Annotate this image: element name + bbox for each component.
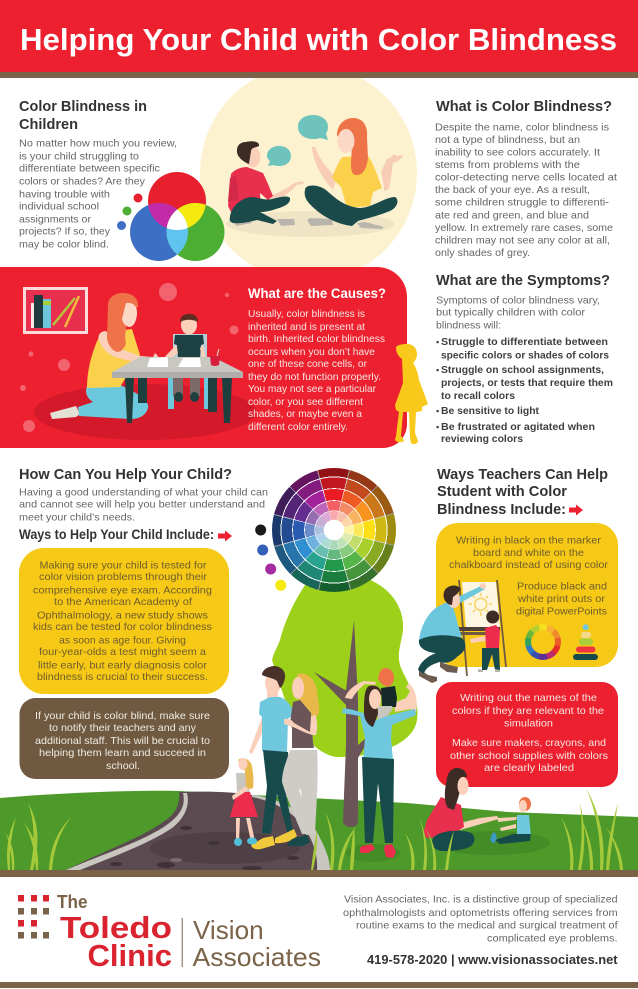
dots beside colour wheel <box>255 524 286 591</box>
logo: The Toledo Clinic Vision Associates: Vision <box>193 915 264 945</box>
panel: teachers tips, red: Writing out the names of the <box>460 692 597 704</box>
panel: notify teachers, brown: If your child is color blind, make sure <box>35 710 210 722</box>
causes text: You may not see a particular <box>248 383 376 395</box>
family: tall man <box>249 666 297 849</box>
causes text: shades, or maybe even a <box>248 408 362 420</box>
body text: only shades of grey. <box>435 247 530 259</box>
symptoms bullet list: Struggle to differentiate between <box>441 336 608 348</box>
icon: stacking toy <box>573 624 598 660</box>
seated mother's head over red panel <box>445 768 468 810</box>
panel: teachers tips, red: are clearly labeled <box>484 762 574 774</box>
causes text: inherited and is present at <box>248 321 365 333</box>
panel: ways to help, yellow: Ophthalmology, a new study shows <box>37 610 208 622</box>
footer description <box>343 894 618 944</box>
body text: meet your child’s needs. <box>19 512 135 524</box>
panel: teachers tips, yellow <box>436 523 618 667</box>
symptoms bullet list: specific colors or shades of colors <box>441 350 609 362</box>
ways teachers can help heading: Ways Teachers Can Help <box>437 466 608 483</box>
panel: ways to help, yellow: four-year-olds a test might seem a <box>39 646 206 658</box>
panel: teachers tips, red <box>436 682 618 787</box>
panel: notify teachers, brown: additional staff. This will be crucial to <box>35 735 210 747</box>
tip text: black and white on boards: chalkboard instead of using color <box>449 559 609 571</box>
ways teachers can help heading: Blindness Include: <box>437 501 566 518</box>
icon: colour mixing venn diagram <box>117 172 224 261</box>
panel: teachers tips, red: colors if they are relevant to the <box>452 705 604 717</box>
body text: inability to see colors accurately. It <box>435 146 600 158</box>
logo square grid <box>18 895 49 938</box>
panel: notify teachers, brown: to notify their teachers and any <box>49 722 197 734</box>
tip text: print outs: digital PowerPoints <box>516 606 607 618</box>
panel: teachers tips, red: simulation <box>504 718 553 730</box>
panel: ways to help, yellow: comprehensive eye exam. According <box>33 584 212 596</box>
woman at table <box>50 293 158 419</box>
body text <box>435 122 617 259</box>
heading: What are the Symptoms? <box>436 272 610 289</box>
intro text: having trouble with <box>19 188 110 200</box>
symptoms bullet list <box>436 336 613 445</box>
boy figure <box>228 141 304 226</box>
boy at table <box>160 314 210 409</box>
causes text: Usually, color blindness is <box>248 308 365 320</box>
panel: ways to help, yellow: Making sure your child is tested for <box>40 560 207 572</box>
body text: Having a good understanding of what your child can <box>19 486 268 498</box>
ground shadows <box>346 831 550 862</box>
symptoms bullet list: Be frustrated or agitated when <box>441 421 595 433</box>
logo: The Toledo Clinic Vision Associates: Clinic <box>88 938 172 973</box>
footer description: complicated eye problems. <box>487 932 618 944</box>
footer description: routine exams to the medical and surgical treatment of <box>356 920 618 932</box>
intro text: is your child struggling to <box>19 150 139 162</box>
sub-heading: Ways to Help Your Child Include: <box>19 527 214 542</box>
body text: children may not see any color at all, <box>435 234 610 246</box>
footer description: ophthalmologists and optometrists offering services from <box>343 907 618 919</box>
intro heading: Color Blindness in Children: Color Blindness in <box>19 98 147 115</box>
logo: The Toledo Clinic Vision Associates: Toledo <box>60 910 172 945</box>
symptoms bullet list: projects, or tests that require them <box>441 377 613 389</box>
body text: yellow. In extremely rare cases, some <box>435 222 613 234</box>
body text <box>19 486 268 524</box>
family: small girl <box>230 758 258 846</box>
family: blonde woman <box>282 673 319 846</box>
heading: How Can You Help Your Child? <box>19 466 232 483</box>
woman figure <box>305 118 403 229</box>
intro text: but typically children with color <box>436 306 586 318</box>
teacher and child at easel <box>418 580 506 683</box>
what are the symptoms section <box>436 272 613 445</box>
panel: ways to help, yellow: to the American Academy of <box>54 596 192 608</box>
panel: what are the causes <box>0 267 407 448</box>
decorative bubbles and floor <box>20 283 256 440</box>
icon: yellow girl silhouette <box>395 344 428 444</box>
footer contact: 419-578-2020 | www.visionassociates.net <box>367 953 618 967</box>
causes text: one of these cone cells, or <box>248 358 367 370</box>
body text: ate red and green, and blue and <box>435 209 589 221</box>
title: Helping Your Child with Color Blindness <box>20 22 617 57</box>
icon: sun drawing <box>469 593 492 616</box>
ways teachers can help heading: Student with Color <box>437 483 567 500</box>
intro text: may be color blind. <box>19 238 109 250</box>
panel: ways to help, yellow: blindness is crucial to their success. <box>37 671 208 683</box>
logo: The Toledo Clinic Vision Associates <box>18 892 321 973</box>
panel: ways to help, yellow: little early, but early diagnosis color <box>38 660 208 672</box>
intro text: projects? If so, they <box>19 226 111 238</box>
how can you help section <box>19 466 268 542</box>
icon: speech bubble small <box>267 146 291 166</box>
body text: Despite the name, color blindness is <box>435 122 609 134</box>
panel: ways to help, yellow <box>19 548 229 694</box>
intro heading: Color Blindness in Children <box>19 98 147 133</box>
panel: notify teachers, brown <box>20 698 229 779</box>
tree trunk <box>314 620 368 827</box>
causes text: color, or you see different <box>248 396 363 408</box>
panel: ways to help, yellow: as soon as age four. Giving <box>59 634 186 646</box>
tree foliage <box>272 572 418 757</box>
icon: framed books picture <box>24 288 86 332</box>
intro text: assignments or <box>19 214 92 226</box>
logo: The Toledo Clinic Vision Associates: Associates <box>192 942 321 972</box>
logo: The Toledo Clinic Vision Associates: The <box>57 892 88 912</box>
tip text: black and white on boards: Writing in black on the marker <box>456 534 602 546</box>
tip text: print outs: Produce black and <box>517 580 607 592</box>
intro text: colors or shades? Are they <box>19 176 146 188</box>
colour wheel <box>272 468 396 592</box>
body text: stems from problems with the <box>435 159 580 171</box>
arrow <box>218 530 232 542</box>
ways teachers can help heading <box>437 466 608 518</box>
intro text: individual school <box>19 200 99 212</box>
tip text: print outs: white print outs or <box>517 593 606 605</box>
causes text: different color entirely. <box>248 421 348 433</box>
panel: notify teachers, brown: school. <box>106 760 140 772</box>
symptoms bullet list: reviewing colors <box>441 433 523 445</box>
causes text <box>248 308 385 433</box>
intro text: differentiate between specific <box>19 162 160 174</box>
body text: some children struggle to differenti- <box>435 197 610 209</box>
illustration: parent and child talking <box>200 78 417 267</box>
body text: and cannot see will help you better understand and <box>19 498 265 510</box>
causes text: birth. Inherited color blindness <box>248 333 385 345</box>
table with papers and cup <box>112 349 243 423</box>
causes text: occurs when you don’t have <box>248 346 375 358</box>
tip text: black and white on boards <box>449 534 609 571</box>
what is color blindness section <box>435 98 617 259</box>
intro heading: Color Blindness in Children: Children <box>19 116 78 133</box>
causes text: they do not function properly. <box>248 371 381 383</box>
family: mother with child on shoulders <box>342 668 417 858</box>
footer bars <box>0 870 638 988</box>
intro text <box>436 294 600 332</box>
heading: What is Color Blindness? <box>436 98 612 115</box>
ground and path <box>0 791 638 870</box>
panel: teachers tips, red: Make sure makers, crayons, and <box>452 737 606 749</box>
body text: the back of your eye. As a result, <box>435 184 590 196</box>
panel: ways to help, yellow: kids can be tested for color blindness <box>33 621 212 633</box>
body text: not a type of blindness, but an <box>435 134 580 146</box>
panel: ways to help, yellow: color vision problems through their <box>39 571 208 583</box>
tip text: black and white on boards: board and white on the <box>473 547 584 559</box>
intro text: blindness will: <box>436 320 501 332</box>
header banner <box>0 0 638 78</box>
symptoms bullet list: to recall colors <box>441 390 515 402</box>
intro text <box>19 138 177 250</box>
intro text: No matter how much you review, <box>19 138 177 150</box>
footer description: Vision Associates, Inc. is a distinctive group of specialized <box>344 894 618 906</box>
grass clumps <box>6 788 623 870</box>
causes heading: What are the Causes? <box>248 286 386 301</box>
panel: notify teachers, brown: helping them learn and succeed in <box>39 747 206 759</box>
symptoms bullet list: Struggle on school assignments, <box>441 364 604 376</box>
icon: colour ring <box>525 624 561 660</box>
seated mother and toddler <box>423 797 531 851</box>
arrow <box>569 504 583 516</box>
symptoms bullet list: Be sensitive to light <box>441 405 539 417</box>
icon: speech bubble large <box>298 115 328 140</box>
panel: teachers tips, red: other school supplies with colors <box>450 750 608 762</box>
intro text: Symptoms of color blindness vary, <box>436 294 600 306</box>
body text: color-detecting nerve cells located at <box>435 172 617 184</box>
tip text: print outs <box>516 580 607 618</box>
